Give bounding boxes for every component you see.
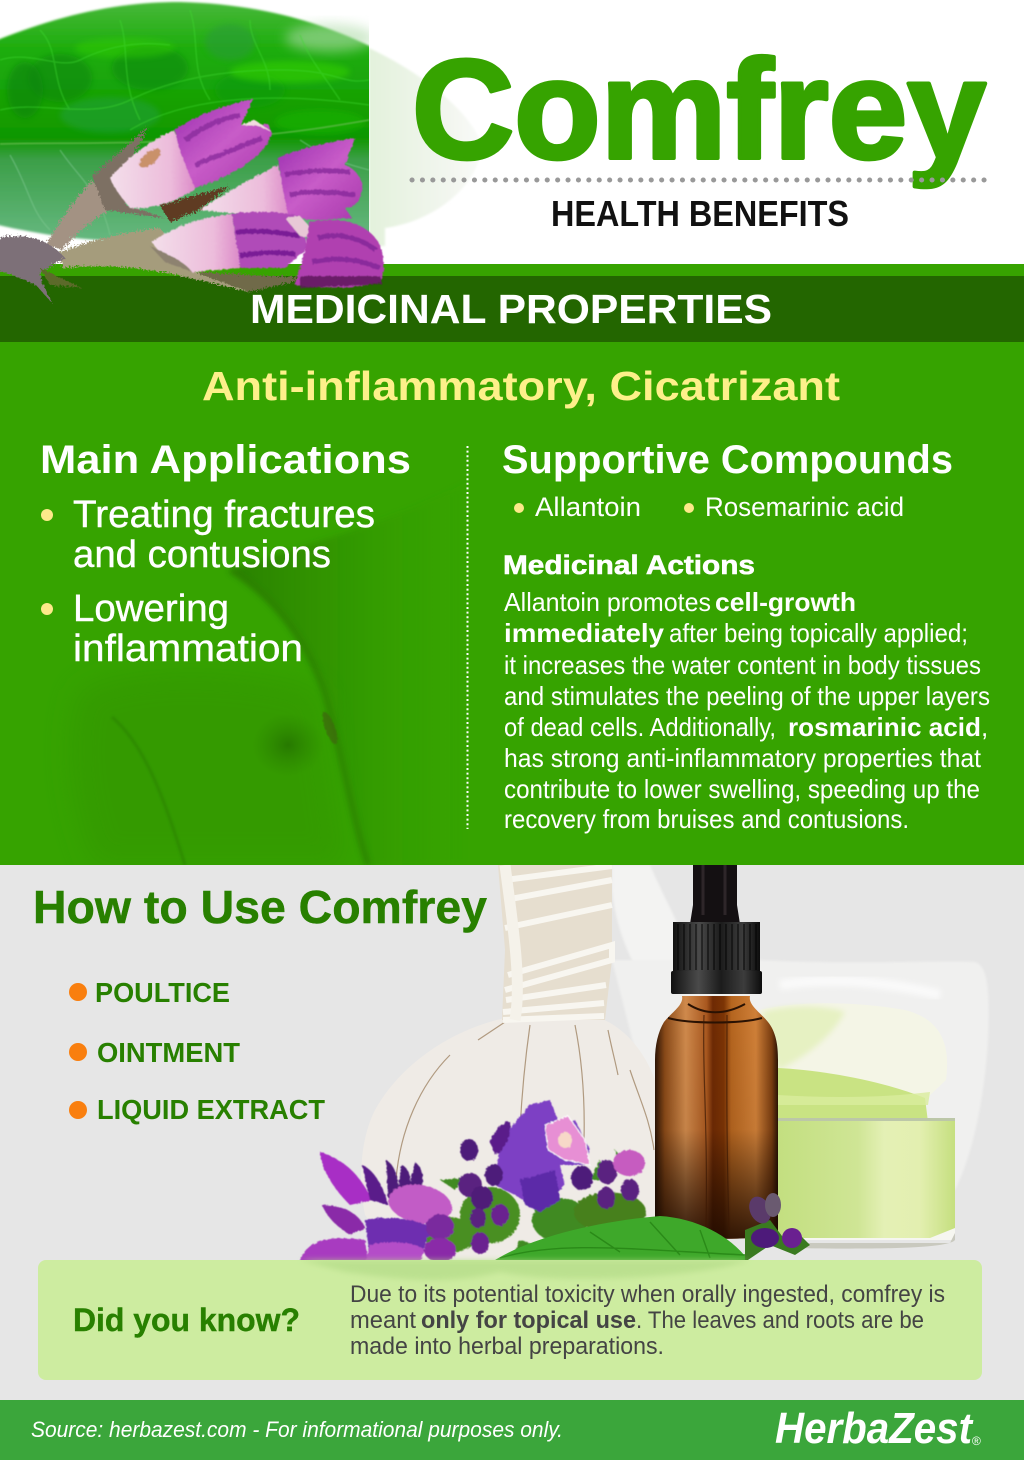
callout text: Due to its potential toxicity when orally ingested, comfrey is <box>350 1281 945 1308</box>
bullet <box>41 509 53 521</box>
panel: supportive compounds <box>502 438 990 834</box>
use: liquid extract: LIQUID EXTRACT <box>97 1094 325 1125</box>
callout heading: Did you know? <box>73 1302 300 1338</box>
application item 1: and contusions <box>73 534 331 576</box>
application item 1 <box>73 494 375 576</box>
heading: how to use comfrey: How to Use Comfrey <box>33 881 487 933</box>
source note: Source: herbazest.com - For informational purposes only. <box>31 1417 563 1442</box>
icon: cream jar <box>760 1003 955 1249</box>
subtitle: HEALTH BENEFITS <box>551 193 849 234</box>
paragraph: medicinal actions: after being topically applied; <box>669 618 968 648</box>
compound: allantoin: Allantoin <box>535 492 641 522</box>
footer band <box>0 1400 1024 1460</box>
use: poultice: POULTICE <box>95 977 230 1008</box>
heading: supportive compounds: Supportive Compounds <box>502 438 953 482</box>
callout box <box>38 1260 982 1380</box>
bruised arm photo background <box>102 530 374 865</box>
paragraph: medicinal actions: , <box>981 712 988 742</box>
compound: rosemarinic acid: Rosemarinic acid <box>705 492 904 522</box>
callout text: . The leaves and roots are be <box>636 1307 924 1334</box>
flower 3 <box>150 212 322 272</box>
paragraph: medicinal actions: of dead cells. Additionally, <box>504 712 776 742</box>
paragraph: medicinal actions: cell-growth <box>715 587 856 617</box>
logo: HerbaZest: ® <box>972 1434 981 1448</box>
paragraph: medicinal actions: Allantoin promotes <box>504 587 711 617</box>
bullet <box>684 503 694 513</box>
application item 2: inflammation <box>73 628 303 670</box>
paragraph: medicinal actions: rosmarinic acid <box>788 712 981 742</box>
tagline: Anti-inflammatory, Cicatrizant <box>202 363 840 409</box>
panel: main applications <box>40 438 411 670</box>
icon: amber dropper bottle <box>655 865 778 1239</box>
flower stems <box>46 127 310 292</box>
icon: comfrey blossoms <box>300 1100 646 1262</box>
bullet <box>41 603 53 615</box>
dark green title band <box>0 276 1024 342</box>
paragraph: medicinal actions: contribute to lower swelling, speeding up the <box>504 774 980 804</box>
paragraph: medicinal actions: and stimulates the peeling of the upper layers <box>504 681 990 711</box>
application item 2 <box>73 588 303 670</box>
flower 1 <box>110 99 272 208</box>
heading: main applications: Main Applications <box>40 438 411 482</box>
bullet <box>514 503 524 513</box>
callout text: made into herbal preparations. <box>350 1333 664 1360</box>
heading: medicinal actions: Medicinal Actions <box>503 550 755 580</box>
paragraph: medicinal actions: it increases the water content in body tissues <box>504 650 981 680</box>
flower 4 <box>295 220 384 288</box>
bullet <box>69 1101 87 1119</box>
dotted column divider <box>466 446 468 829</box>
application item 2: Lowering <box>73 588 229 630</box>
green header band <box>0 264 1024 276</box>
paragraph: medicinal actions: recovery from bruises and contusions. <box>504 804 909 834</box>
section heading: MEDICINAL PROPERTIES <box>250 286 772 332</box>
callout: did you know <box>38 1260 982 1380</box>
header image: comfrey leaf <box>0 2 482 246</box>
list: forms of use <box>69 977 325 1125</box>
dotted divider <box>412 178 986 182</box>
paragraph: medicinal actions <box>504 587 990 834</box>
reflection of flowers in box <box>300 1260 750 1280</box>
logo: HerbaZest: HerbaZest <box>775 1404 974 1453</box>
callout text: only for topical use <box>421 1307 636 1334</box>
callout text: meant <box>350 1307 416 1334</box>
use: ointment: OINTMENT <box>97 1037 240 1068</box>
flower 2 <box>200 138 362 220</box>
paragraph: medicinal actions: immediately <box>504 618 665 648</box>
title: Comfrey <box>412 30 986 188</box>
main green panel <box>0 342 1024 865</box>
icon: comfrey leaf and small buds <box>495 1193 810 1260</box>
header image: comfrey flowers <box>0 99 384 303</box>
flower cluster base <box>0 236 82 303</box>
paragraph: medicinal actions: has strong anti-inflammatory properties that <box>504 743 982 773</box>
panel: how to use background <box>0 865 1024 1400</box>
bullet <box>69 1043 87 1061</box>
photo: mortar, bag, bottle, cream and flowers <box>300 865 989 1275</box>
application item 1: Treating fractures <box>73 494 375 536</box>
callout text <box>350 1281 945 1360</box>
green foliage <box>424 1150 646 1262</box>
icon: herbal compress bag <box>361 865 658 1262</box>
icon: mortar and pestle <box>612 865 989 1190</box>
bullet <box>69 983 87 1001</box>
